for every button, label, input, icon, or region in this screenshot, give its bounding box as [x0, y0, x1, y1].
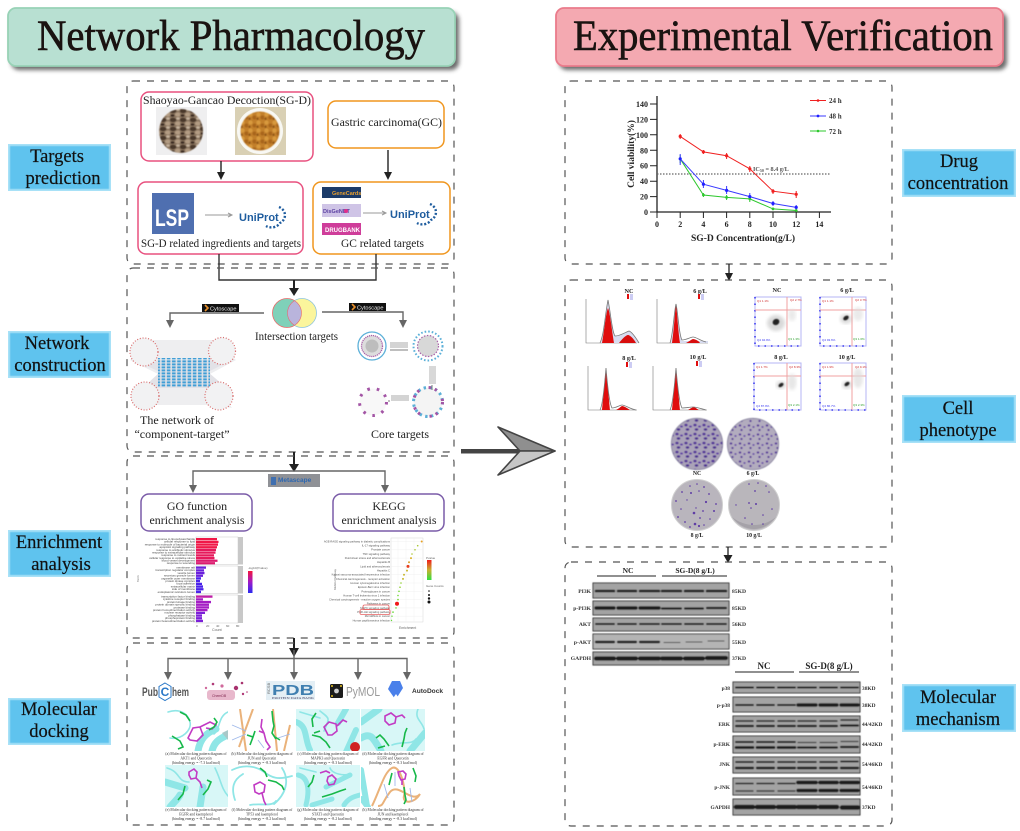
captions: docking row 2: JUN and kaempferol — [378, 812, 408, 816]
western blot: PI3K/AKT panels: 37KD — [732, 656, 746, 662]
western blot: MAPK panels: 37KD — [862, 805, 876, 811]
western blot: MAPK panels: JNK — [719, 762, 731, 768]
logo: PyMOL: PyMOL — [346, 684, 380, 699]
chart: cell viability line chart: 6 — [725, 220, 729, 229]
label: Cell phenotype: Cell — [943, 399, 973, 419]
western blot: MAPK panels: p38 — [722, 686, 730, 692]
cell cycle histogram: 8 g/L — [588, 355, 637, 410]
colony dish: 8 g/L: 8 g/L — [691, 533, 703, 539]
chart: GO bar chart: response to wounding — [167, 561, 195, 565]
logo: PyMOL — [330, 684, 380, 699]
label: Enrichment analysis — [8, 530, 111, 577]
western blot: MAPK panels: 44/42KD — [862, 742, 882, 748]
logo: AutoDock — [388, 681, 443, 699]
western blot: PI3K/AKT panels: PI3K — [578, 589, 592, 595]
chart: KEGG dot plot: MicroRNAs in cancer — [365, 614, 390, 618]
chart: KEGG dot plot: TNF signaling pathway — [363, 552, 391, 556]
chart: GO bar chart: 40 — [216, 624, 220, 628]
chart: cell viability line chart: 0 — [644, 208, 648, 217]
label: Network construction: Network — [25, 334, 90, 354]
arrow: cell phenotype to molecular mechanism — [724, 547, 732, 563]
captions: docking row 1: (c) Molecular docking pattern diagram of — [297, 752, 359, 756]
apoptosis flow plot: 8 g/L: Q1 1.7% — [756, 365, 768, 369]
chart: GO bar chart: response to lipopolysaccharide — [155, 537, 195, 541]
arrow: network pharmacology to experimental verification — [461, 427, 555, 475]
label: Network construction: construction — [14, 356, 106, 376]
apoptosis flow plot: 6 g/L: 6 g/L — [840, 287, 854, 294]
SG-D source box — [141, 92, 313, 161]
western blot: PI3K/AKT panels: GAPDH — [571, 656, 592, 662]
chart: cell viability line chart: 0 — [655, 220, 659, 229]
chart: GO bar chart: protease binding — [174, 605, 195, 609]
chart legend — [810, 97, 842, 136]
chart: KEGG dot plot: Hepatitis C — [377, 568, 390, 572]
western blot: MAPK panels — [711, 682, 882, 815]
text: network caption: “component-target” — [134, 427, 230, 441]
western blot: PI3K/AKT panels: 85KD — [732, 589, 746, 595]
chart: cell viability line chart: IC — [753, 166, 760, 173]
text: network caption — [134, 413, 230, 441]
KEGG enrichment heading box: enrichment analysis — [342, 513, 437, 527]
GC related targets box: GC related targets — [341, 236, 424, 250]
apoptosis flow plot: 8 g/L: 8 g/L — [774, 354, 788, 361]
captions: docking row 1: JUN and Quercetin — [248, 756, 276, 760]
chart: GO bar chart: side of membrane — [172, 587, 195, 591]
text: network caption: The network of — [140, 413, 214, 427]
connector: enrichment to docking — [289, 638, 299, 657]
chart: GO bar chart: response to extracellular stimulus — [152, 550, 196, 554]
label: Targets prediction: prediction — [25, 169, 101, 189]
western blot: MAPK panels: ERK — [718, 722, 731, 728]
panel: cell phenotype — [565, 280, 892, 547]
logo: RCSB PDB: PROTEIN DATA BANK — [272, 696, 315, 700]
KEGG enrichment heading box — [333, 494, 444, 531]
badge: Cytoscape right — [349, 303, 386, 312]
captions: docking row 2: (f) Molecular docking pattern diagram of — [232, 808, 293, 812]
chart: KEGG dot plot: Proteoglycans in cancer — [361, 589, 390, 593]
arrow: SG-D to ingredients — [217, 161, 225, 180]
chart: GO bar chart: protein homodimerization activity — [153, 608, 196, 612]
logo: PubChem: Pub — [142, 685, 158, 699]
heading: Experimental Verification: Experimental Verification — [573, 13, 993, 60]
captions: docking row 2: (binding energy = -8.7 kcal/mol) — [172, 817, 221, 821]
apoptosis flow plot: NC: NC — [773, 287, 781, 294]
chart: KEGG dot plot: Epstein-Barr virus infection — [358, 585, 390, 589]
panel: targets prediction — [127, 81, 454, 264]
chart: cell viability line chart: 12 — [792, 220, 800, 229]
GC related targets box — [313, 182, 450, 254]
chart: KEGG dot plot: Chemical carcinogenesis - reactive oxygen species — [329, 598, 391, 602]
colony dish: 6 g/L: 6 g/L — [747, 471, 759, 477]
chart: cell viability line chart: 40 — [640, 177, 648, 186]
western blot: PI3K/AKT group header: NC — [623, 566, 633, 575]
chart: cell viability line chart: 8 — [748, 220, 752, 229]
chart: cell viability line chart: 4 — [701, 220, 705, 229]
chart: GO bar chart: response to nutrient levels — [161, 553, 196, 557]
apoptosis flow plot: 10 g/L: 10 g/L — [839, 354, 855, 361]
captions: docking row 1: (b) Molecular docking pattern diagram of — [231, 752, 293, 756]
badge: Cytoscape right: Cytoscape — [357, 306, 383, 312]
cell cycle histogram: NC — [586, 288, 639, 343]
apoptosis flow plot: NC — [755, 287, 802, 346]
chart: cell viability line chart: 120 — [636, 115, 648, 124]
captions: docking row 2: (h) Molecular docking pattern diagram of — [362, 808, 424, 812]
docking image: g — [296, 765, 360, 807]
logo: chemical database: ChemDB — [212, 694, 227, 698]
chart: GO bar chart: organelle outer membrane — [161, 576, 195, 580]
captions: docking row 2: (binding energy = -8.2 kcal/mol) — [238, 817, 287, 821]
apoptosis flow plot: NC: Q4 94.9% — [757, 338, 771, 342]
apoptosis flow plot: 6 g/L: Q3 1.6% — [853, 337, 865, 341]
chart: cell viability line chart: SG-D Concentration(g/L) — [691, 233, 795, 244]
chart: GO bar chart: Term — [136, 575, 140, 582]
apoptosis flow plot: 6 g/L — [820, 287, 867, 346]
label: Molecular docking — [8, 698, 111, 745]
docking image: h — [361, 768, 420, 807]
chart: GO bar chart: focal adhesion — [176, 582, 195, 586]
chart: GO bar chart: transcription factor binding — [161, 594, 195, 598]
chart: KEGG dot plot: Human T-cell leukemia virus 1 infection — [343, 593, 391, 597]
colony dish: 10 g/L — [728, 480, 780, 539]
captions: docking row 2: STAT3 and Quercetin — [312, 812, 344, 816]
docking image: e — [165, 765, 228, 807]
SG-D ingredients and targets box — [138, 182, 303, 254]
arrow: to core targets — [322, 312, 407, 328]
chart: GO bar chart: 80 — [236, 624, 240, 628]
chart: KEGG dot plot: KEGG Pathway — [333, 568, 337, 590]
western blot: MAPK panels: GAPDH — [711, 805, 731, 811]
chart: GO bar chart: protein domain specific binding — [155, 603, 195, 607]
network: component-target — [130, 338, 236, 410]
label: Drug concentration: Drug — [940, 152, 978, 172]
chart: KEGG dot plot: Fluid shear stress and atherosclerosis — [345, 556, 391, 560]
chart: GO bar chart — [136, 537, 268, 632]
chart: cell viability line chart: 140 — [636, 100, 648, 109]
GC related targets box: UniProt — [390, 209, 430, 221]
western blot: PI3K/AKT panels — [571, 583, 746, 665]
chart: KEGG dot plot: Gene Counts — [426, 584, 444, 588]
heading: Network Pharmacology — [8, 8, 459, 70]
label: Targets prediction — [8, 144, 111, 191]
panel: network construction — [127, 268, 454, 452]
western blot: MAPK panels: 38KD — [862, 703, 876, 709]
chart: GO bar chart: membrane raft — [176, 566, 195, 570]
panel: molecular docking — [127, 643, 454, 825]
western blot: PI3K/AKT panels: 55KD — [732, 640, 746, 646]
apoptosis flow plot: 10 g/L: Q1 1.9% — [822, 365, 834, 369]
docking image: d — [361, 709, 425, 751]
western blot: MAPK panels: p-p38 — [717, 703, 730, 709]
captions: docking row 1: AKT1 and Quercetin — [180, 756, 212, 760]
apoptosis flow plot: 10 g/L — [820, 354, 867, 410]
SG-D source box: Shaoyao-Gancao Decoction(SG-D) — [143, 93, 311, 107]
GO enrichment heading box: GO function — [167, 499, 227, 513]
label: Enrichment analysis: Enrichment — [16, 533, 103, 553]
apoptosis flow plot: NC: Q2 2.7% — [790, 298, 802, 302]
chart: GO bar chart: response to molecule of bacterial origin — [145, 542, 195, 546]
logo: RCSB PDB — [266, 681, 315, 700]
chart: cell viability line chart: 14 — [815, 220, 823, 229]
captions: docking row 2 — [165, 808, 424, 821]
docking image: a — [168, 711, 228, 751]
chart: cell viability line chart: 20 — [640, 193, 648, 202]
logo: PubChem — [142, 683, 189, 700]
apoptosis flow plot: 10 g/L: Q4 86.7% — [822, 404, 836, 408]
panel: drug concentration — [565, 81, 892, 264]
captions: docking row 2: (binding energy = -8.3 kcal/mol) — [369, 817, 418, 821]
apoptosis flow plot: 8 g/L — [754, 354, 801, 410]
chart: KEGG dot plot: Hepatitis B — [377, 560, 390, 564]
label: Molecular mechanism: Molecular — [920, 688, 996, 708]
cell cycle histogram: 6 g/L — [657, 288, 708, 343]
western blot: PI3K/AKT group header — [597, 566, 727, 576]
chart: GO bar chart: apoptotic signaling pathway — [159, 545, 196, 549]
chart: KEGG dot plot: Prostate cancer — [371, 548, 390, 552]
colony dish: 8 g/L — [672, 480, 722, 539]
chart: cell viability line chart: 80 — [640, 146, 648, 155]
captions: docking row 1: (binding energy = -7.3 kcal/mol) — [172, 761, 221, 765]
chart: KEGG dot plot: Kaposi sarcoma-associated herpesvirus infection — [332, 573, 390, 577]
chart: cell viability line chart: 2 — [678, 220, 682, 229]
chart: GO bar chart: response to antibiotic stimulus — [156, 548, 196, 552]
arrow: to component-target network — [166, 313, 264, 328]
apoptosis flow plot: 6 g/L: Q2 3.7% — [855, 298, 867, 302]
chart: GO bar chart: extracellular matrix — [171, 584, 196, 588]
chart: cell viability line chart: 100 — [636, 131, 648, 140]
chart: GO bar chart: phosphoprotein binding — [165, 616, 195, 620]
chart legend: 24 h — [829, 97, 842, 105]
chart: KEGG dot plot: MAPK signaling pathway — [360, 606, 391, 610]
western blot: PI3K/AKT panels: 56KD — [732, 622, 746, 628]
docking image: f — [232, 766, 292, 805]
colony dish: 10 g/L: 10 g/L — [746, 533, 762, 539]
chart: GO bar chart: protein kinase binding — [167, 600, 195, 604]
western blot: MAPK panels: 38KD — [862, 686, 876, 692]
captions: docking row 1: (binding energy = -8.3 kcal/mol) — [369, 761, 418, 765]
chart: KEGG dot plot: Chemical carcinogenesis - receptor activation — [336, 577, 390, 581]
chart: cell viability line chart: 50 — [760, 168, 764, 173]
captions: docking row 1: (binding energy = -8.3 kcal/mol) — [238, 761, 287, 765]
panel: enrichment analysis — [127, 456, 454, 638]
chart: KEGG dot plot: Human papillomavirus infection — [353, 618, 390, 622]
chart: GO bar chart: 60 — [226, 624, 230, 628]
badge: Cytoscape left: Cytoscape — [210, 306, 236, 312]
chart: KEGG dot plot: Pathways in cancer — [367, 602, 390, 606]
label: Molecular mechanism — [902, 684, 1016, 732]
logo: AutoDock: AutoDock — [412, 688, 443, 695]
logo: PubChem: hem — [172, 685, 189, 699]
chart: GO bar chart: protein kinase complex — [165, 579, 196, 583]
chart: GO bar chart: 0 — [196, 624, 198, 628]
captions: docking row 2: (binding energy = -8.2 kcal/mol) — [304, 817, 353, 821]
western blot: MAPK group header — [735, 661, 859, 672]
logo: RCSB PDB: RCSB — [266, 683, 271, 694]
chart: KEGG dot plot: IL-17 signaling pathway — [362, 544, 391, 548]
label: Molecular docking: Molecular — [21, 700, 97, 720]
arrow: drug concentration to cell phenotype — [725, 264, 733, 281]
label: Enrichment analysis: analysis — [31, 555, 91, 575]
chart: KEGG dot plot: AGE-RAGE signaling pathway in diabetic complications — [324, 539, 391, 543]
chart: GO bar chart: Count — [212, 628, 222, 632]
western blot: MAPK panels: p-JNK — [714, 785, 731, 791]
logo: chemical database — [205, 682, 248, 700]
apoptosis flow plot: 10 g/L: Q3 2.3% — [853, 403, 865, 407]
western blot: PI3K/AKT group header: SG-D(8 g/L) — [675, 566, 715, 575]
text: intersection targets: Intersection targets — [255, 329, 338, 343]
apoptosis flow plot: NC: Q1 1.1% — [757, 299, 769, 303]
cell cycle histogram: 8 g/L: 8 g/L — [622, 355, 636, 362]
label: Drug concentration: concentration — [908, 174, 1008, 194]
connector: merge into intersection — [219, 254, 376, 296]
chart: GO bar chart: phosphatase binding — [168, 613, 195, 617]
label: Cell phenotype: phenotype — [919, 421, 997, 441]
captions: docking row 2: EGFR and kaempferol — [179, 812, 213, 816]
chart: GO bar chart: secretory granule lumen — [164, 574, 195, 578]
apoptosis flow plot: 6 g/L: Q4 93.6% — [822, 338, 836, 342]
chart: GO bar chart: 20 — [206, 624, 210, 628]
SG-D ingredients and targets box: UniProt — [239, 212, 279, 224]
western blot: MAPK group header: NC — [758, 661, 770, 671]
captions: docking row 2: TP53 and kaempferol — [246, 812, 278, 816]
chart: cell viability line chart: 60 — [640, 162, 648, 171]
gastric carcinoma box — [328, 101, 444, 148]
chart: cell viability line chart — [626, 96, 831, 244]
chart: GO bar chart: protein heterodimerization activity — [152, 619, 196, 623]
logo: RCSB PDB: PDB — [272, 682, 314, 699]
venn diagram — [272, 298, 316, 328]
captions: docking row 1 — [165, 752, 424, 765]
GO enrichment heading box — [141, 494, 252, 531]
western blot: MAPK panels: 44/42KD — [862, 722, 882, 728]
western blot: MAPK panels: p-ERK — [714, 742, 731, 748]
chart: KEGG dot plot: Lipid and atherosclerosis — [360, 564, 391, 568]
captions: docking row 1: EGFR and Quercetin — [377, 756, 409, 760]
GC related targets box: DisGeNET — [323, 209, 351, 215]
docking image: c — [296, 709, 360, 752]
colony dish: NC — [671, 418, 723, 477]
docking image: b — [232, 709, 290, 751]
chart: GO bar chart: cellular response to oxidative stress — [149, 556, 196, 560]
apoptosis flow plot: 6 g/L: Q1 1.1% — [822, 299, 834, 303]
label: Drug concentration — [902, 149, 1016, 197]
KEGG enrichment heading box: KEGG — [372, 499, 406, 513]
arrows: to GO and KEGG — [189, 471, 389, 493]
colony dish: NC: NC — [693, 471, 701, 477]
colony dish: 6 g/L — [727, 418, 779, 477]
apoptosis flow plot: 10 g/L: Q2 9.1% — [855, 365, 867, 369]
chart: GO bar chart: nuclear receptor activity — [164, 611, 196, 615]
chart: KEGG dot plot — [324, 538, 444, 630]
cell cycle histogram: NC: NC — [625, 288, 633, 295]
western blot: MAPK panels: 54/46KD — [862, 785, 882, 791]
label: Network construction — [8, 331, 111, 378]
text: core targets: Core targets — [371, 427, 429, 441]
heading: Network Pharmacology: Network Pharmacology — [37, 13, 425, 60]
captions: docking row 2: (e) Molecular docking pattern diagram of — [165, 808, 227, 812]
arrow: GC to targets — [384, 150, 392, 180]
western blot: PI3K/AKT panels: p-AKT — [574, 640, 591, 646]
chart: cell viability line chart: Cell viability(%) — [626, 120, 637, 188]
captions: docking row 1: (d) Molecular docking pattern diagram of — [362, 752, 424, 756]
captions: docking row 2: (g) Molecular docking pattern diagram of — [297, 808, 359, 812]
badge: Metascape: Metascape — [278, 477, 312, 484]
GC related targets box: DRUGBANK — [325, 228, 361, 234]
gastric carcinoma box: Gastric carcinoma(GC) — [331, 115, 442, 129]
label: Cell phenotype — [902, 395, 1016, 443]
western blot: PI3K/AKT panels: 85KD — [732, 606, 746, 612]
chart: KEGG dot plot: Enrichment — [399, 626, 416, 630]
apoptosis flow plot: 8 g/L: Q2 8.3% — [789, 365, 801, 369]
captions: docking row 1: MAPK3 and Quercetin — [311, 756, 345, 760]
chart: GO bar chart: transcription regulator complex — [155, 568, 196, 572]
apoptosis flow plot: 8 g/L: Q3 2.1% — [788, 403, 800, 407]
chart: GO bar chart: endoplasmic reticulum lumen — [158, 590, 195, 594]
chart legend: 72 h — [829, 128, 842, 136]
SG-D ingredients and targets box: SG-D related ingredients and targets — [141, 236, 301, 250]
chart: KEGG dot plot: PI3K-Akt signaling pathway — [357, 610, 391, 614]
captions: docking row 1: (a) Molecular docking pattern diagram of — [165, 752, 227, 756]
chart: cell viability line chart: 10 — [769, 220, 777, 229]
chart: GO bar chart: cytokine receptor binding — [163, 597, 195, 601]
badge: Metascape — [268, 474, 320, 487]
arrows: to docking tools — [164, 650, 411, 680]
chart: GO bar chart: vesicle lumen — [177, 571, 195, 575]
western blot: MAPK panels: 54/46KD — [862, 762, 882, 768]
chart: KEGG dot plot: Human cytomegalovirus infection — [350, 581, 390, 585]
chart: cell viability line chart: = 8.4 g/L — [764, 166, 789, 173]
panel: molecular mechanism — [565, 562, 892, 826]
captions: docking row 1: (binding energy = -8.3 kcal/mol) — [304, 761, 353, 765]
network: core target filtering — [358, 332, 442, 416]
cell cycle histogram: 10 g/L — [653, 354, 707, 410]
chart: GO bar chart: cellular response to lipid — [164, 540, 195, 544]
chart: GO bar chart: blood vessel development — [162, 559, 195, 563]
GO enrichment heading box: enrichment analysis — [150, 513, 245, 527]
western blot: MAPK group header: SG-D(8 g/L) — [805, 661, 853, 671]
SG-D ingredients and targets box: LSP — [155, 205, 189, 232]
apoptosis flow plot: NC: Q3 1.3% — [788, 337, 800, 341]
label: Targets prediction: Targets — [30, 147, 84, 167]
connector: network to enrichment — [289, 452, 299, 472]
cell cycle histogram: 6 g/L: 6 g/L — [693, 288, 707, 295]
western blot: PI3K/AKT panels: p-PI3K — [573, 606, 592, 612]
chart: GO bar chart: -log10(Pvalue) — [248, 566, 268, 570]
label: Molecular mechanism: mechanism — [916, 710, 1001, 730]
cell cycle histogram: 10 g/L: 10 g/L — [690, 354, 706, 361]
badge: Cytoscape left — [202, 304, 239, 312]
western blot: PI3K/AKT panels: AKT — [579, 622, 591, 628]
apoptosis flow plot: 8 g/L: Q4 87.9% — [756, 404, 770, 408]
chart: KEGG dot plot: Pvalue — [426, 556, 436, 560]
GC related targets box: GeneCards — [332, 191, 361, 197]
logo: PubChem: C — [161, 685, 170, 699]
chart legend: 48 h — [829, 112, 842, 120]
label: Molecular docking: docking — [29, 722, 89, 742]
